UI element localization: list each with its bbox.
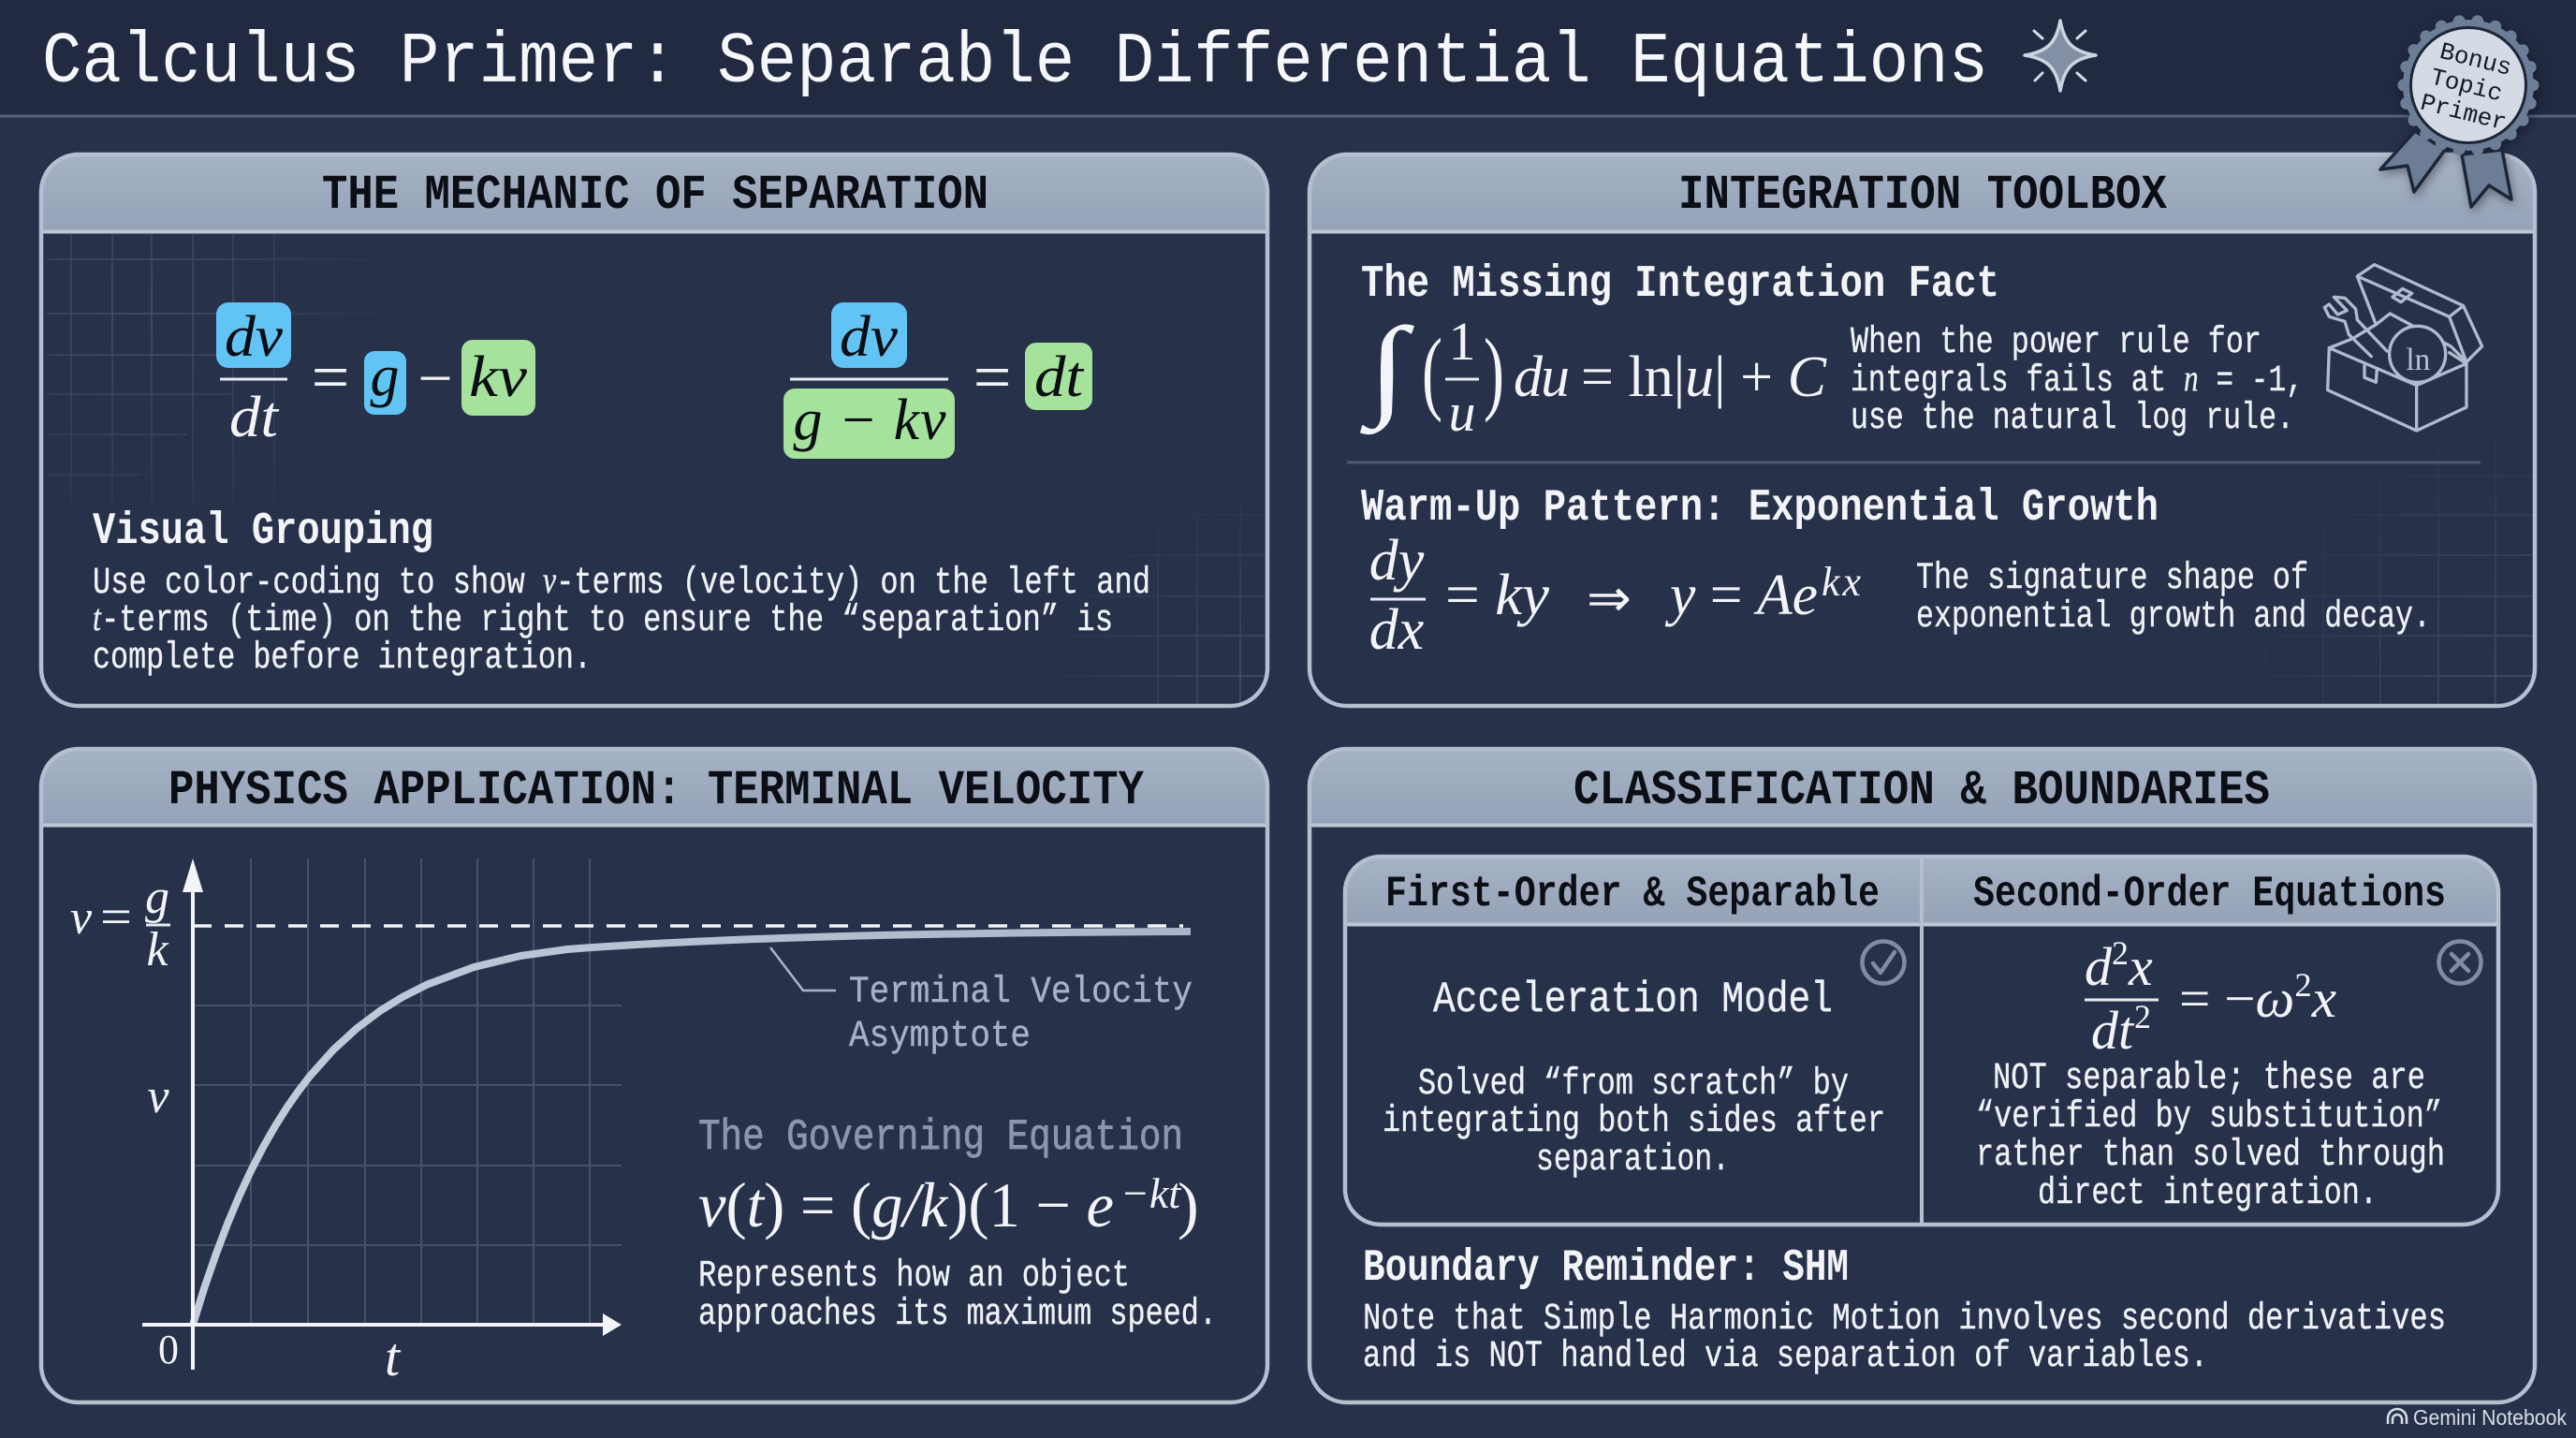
equation: integral of 1/u: ) xyxy=(1484,319,1504,423)
equation: second order: x xyxy=(2311,968,2336,1029)
equation: integral of 1/u: = ln|u| + C xyxy=(1581,345,1827,409)
panel: integration toolbox xyxy=(1310,154,2535,706)
equation: integral of 1/u: ( xyxy=(1422,319,1442,423)
equation: exponential growth: = ky xyxy=(1445,564,1549,627)
panel: the mechanic of separation xyxy=(41,154,1267,706)
axis label: v: v xyxy=(147,1070,169,1123)
text block: first-order xyxy=(1383,1064,1885,1181)
text block: signature shape xyxy=(1916,558,2431,638)
panel heading: CLASSIFICATION & BOUNDARIES xyxy=(1573,763,2270,818)
text block: visual grouping xyxy=(93,559,1150,680)
panel heading: PHYSICS APPLICATION: TERMINAL VELOCITY xyxy=(168,763,1145,818)
equation: separated dv/(g-kv) = dt xyxy=(783,302,1092,459)
equation: second order: 2 xyxy=(2134,998,2151,1035)
equation: second order: x xyxy=(2128,936,2153,997)
chart: terminal velocity curve xyxy=(70,858,1191,1387)
text block: second-order: NOT separable; these are xyxy=(1993,1058,2425,1100)
text block: boundary reminder xyxy=(1363,1299,2446,1378)
badge: bonus topic primer: Bonus xyxy=(2437,37,2514,82)
equation: second order xyxy=(2085,934,2336,1061)
panel heading: INTEGRATION TOOLBOX xyxy=(1678,168,2168,223)
equation: integral of 1/u: du xyxy=(1514,345,1570,409)
equation: v(t): v(t) = (g/k)(1 − e xyxy=(698,1169,1114,1240)
subheading: warm-up pattern: Warm-Up Pattern: Exponential Growth xyxy=(1361,483,2159,534)
watermark: gemini notebook: Gemini Notebook xyxy=(2413,1405,2567,1430)
callout: terminal velocity asymptote xyxy=(770,947,1193,1058)
axis label: v = g/k: = xyxy=(100,888,132,945)
equation: second order: 2 xyxy=(2294,966,2312,1004)
text block: signature shape: exponential growth and decay. xyxy=(1916,596,2431,638)
text block: visual grouping: complete before integration. xyxy=(93,638,592,680)
axis label: v = g/k: g xyxy=(145,871,169,924)
text block: first-order: integrating both sides after xyxy=(1383,1101,1885,1143)
text block: first-order: separation. xyxy=(1536,1139,1730,1181)
icon: toolbox with ln: ln xyxy=(2406,343,2431,377)
equation: separated dv/(g-kv) = dt: g − kv xyxy=(794,389,946,452)
equation: second order: dt xyxy=(2091,1000,2135,1061)
subheading: governing equation: The Governing Equation xyxy=(698,1113,1183,1162)
equation: exponential growth: ⇒ xyxy=(1587,570,1632,628)
icon: sparkle star xyxy=(2025,21,2096,91)
text block: maximum speed: approaches its maximum speed. xyxy=(698,1294,1217,1336)
equation: integral of 1/u xyxy=(1359,304,1827,443)
callout: terminal velocity asymptote: Asymptote xyxy=(849,1016,1031,1058)
equation: separated dv/(g-kv) = dt: = xyxy=(973,340,1011,415)
equation: separated dv/(g-kv) = dt: dv xyxy=(840,305,898,369)
equation: second order: d xyxy=(2085,936,2113,997)
text block: natural log rule: integrals fails at n = -1, xyxy=(1851,357,2304,403)
axis label: v = g/k: v xyxy=(70,891,93,945)
badge: bonus topic primer: Topic xyxy=(2427,63,2505,108)
equation: exponential growth: kx xyxy=(1822,559,1861,605)
axis label: v = g/k: k xyxy=(146,923,168,976)
subheading: visual grouping: Visual Grouping xyxy=(93,506,433,557)
text block: natural log rule: When the power rule for xyxy=(1851,322,2261,364)
text block: signature shape: The signature shape of xyxy=(1916,558,2308,600)
text block: second-order: direct integration. xyxy=(2038,1173,2378,1215)
text block: natural log rule xyxy=(1851,322,2304,440)
text block: second-order: “verified by substitution” xyxy=(1976,1096,2442,1138)
equation: integral of 1/u: u xyxy=(1449,382,1475,443)
icon: cross mark xyxy=(2439,942,2481,983)
subheading: boundary reminder: Boundary Reminder: SHM xyxy=(1363,1243,1849,1294)
equation: second order: 2 xyxy=(2112,934,2129,972)
equation: original dv/dt = g - kv: = xyxy=(312,340,349,415)
axis label: v = g/k xyxy=(70,871,170,976)
text block: second-order xyxy=(1976,1058,2445,1215)
equation: original dv/dt = g - kv: g xyxy=(371,345,399,408)
icon: toolbox with ln xyxy=(2324,265,2482,431)
text block: maximum speed: Represents how an object xyxy=(698,1255,1130,1298)
panel heading: THE MECHANIC OF SEPARATION xyxy=(322,168,988,223)
subheading: acceleration model: Acceleration Model xyxy=(1433,976,1833,1024)
axis label: t: t xyxy=(385,1327,402,1387)
equation: original dv/dt = g - kv: kv xyxy=(469,345,528,409)
panel: physics application terminal velocity xyxy=(41,749,1267,1402)
equation: original dv/dt = g - kv: dv xyxy=(225,305,283,369)
column heading: second-order: Second-Order Equations xyxy=(1973,870,2446,918)
badge: bonus topic primer xyxy=(2380,20,2534,207)
text block: visual grouping: Use color-coding to show v-terms (velocity) on the left and xyxy=(93,559,1150,605)
axis label: origin: 0 xyxy=(158,1327,179,1372)
equation: v(t): ) xyxy=(1178,1169,1199,1240)
subheading: missing integration fact: The Missing Integration Fact xyxy=(1361,259,1999,310)
title: Calculus Primer: Separable Differential Equations xyxy=(42,22,1988,104)
equation: separated dv/(g-kv) = dt: dt xyxy=(1034,345,1085,409)
panel: classification and boundaries xyxy=(1310,749,2535,1402)
equation: integral of 1/u: 1 xyxy=(1449,311,1475,372)
equation: exponential growth xyxy=(1369,529,1861,662)
comparison table xyxy=(1345,857,2498,1226)
equation: v(t): −kt xyxy=(1120,1169,1181,1217)
equation: integral of 1/u: ∫ xyxy=(1359,304,1415,435)
text block: natural log rule: use the natural log rule. xyxy=(1851,398,2294,440)
equation: exponential growth: y = Ae xyxy=(1664,564,1818,627)
text block: boundary reminder: and is NOT handled via separation of variables. xyxy=(1363,1336,2208,1378)
badge: bonus topic primer: Primer xyxy=(2418,89,2510,137)
text block: visual grouping: t-terms (time) on the right to ensure the “separation” is xyxy=(93,596,1113,642)
text block: maximum speed xyxy=(698,1255,1217,1336)
text block: second-order: rather than solved through xyxy=(1976,1135,2445,1177)
equation: original dv/dt = g - kv: dt xyxy=(229,386,280,449)
equation: original dv/dt = g - kv xyxy=(216,302,535,449)
equation: exponential growth: dy xyxy=(1369,529,1425,593)
callout: terminal velocity asymptote: Terminal Velocity xyxy=(849,972,1193,1014)
equation: exponential growth: dx xyxy=(1369,598,1425,662)
equation: second order: = −ω xyxy=(2179,968,2294,1029)
equation: original dv/dt = g - kv: − xyxy=(417,345,453,413)
icon: check mark xyxy=(1863,942,1904,983)
column heading: first-order: First-Order & Separable xyxy=(1385,870,1880,918)
text block: first-order: Solved “from scratch” by xyxy=(1418,1064,1849,1106)
